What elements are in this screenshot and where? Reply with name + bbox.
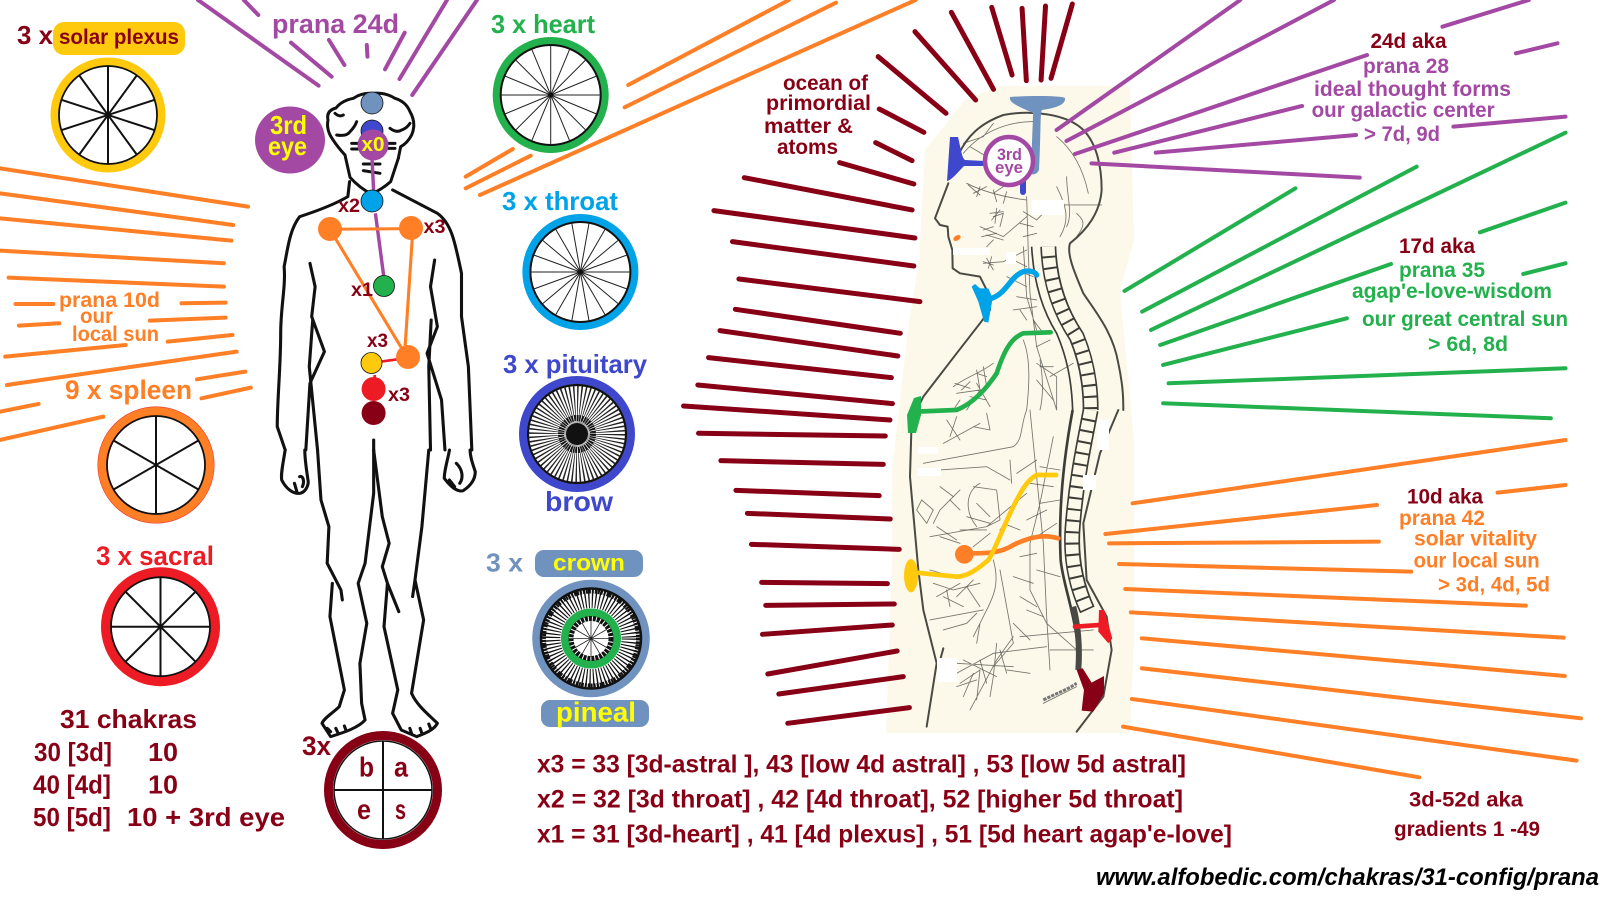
prana 10d label: prana 10d (59, 289, 160, 312)
source url: www.alfobedic.com/chakras/31-config/prana (1096, 864, 1599, 891)
prana 10d label: our (80, 305, 113, 328)
solar plexus chakra (17, 20, 185, 168)
third eye badge: 3rd (270, 110, 307, 140)
gradients text block: 3d-52d aka (1409, 789, 1523, 812)
10d prana 42 text block: solar vitality (1414, 528, 1537, 551)
third eye badge on profile (985, 137, 1033, 185)
10d prana 42 text block: 10d aka (1407, 485, 1483, 508)
wheel: sacral (106, 572, 215, 681)
wheel: spleen (98, 406, 214, 524)
bottom legend x1 x2 x3: x1 = 31 [3d-heart] , 41 [4d plexus] , 51 [5d heart agap'e-love] (537, 821, 1232, 849)
wheel: base (328, 736, 438, 844)
chakra count table: 10 + 3rd eye (127, 802, 285, 832)
base letters: e (357, 794, 371, 825)
body labels x1 x2 x3: x3 (388, 385, 410, 406)
base letters: a (394, 752, 408, 783)
pill: solar plexus (53, 22, 185, 55)
heart chakra (491, 9, 605, 149)
third eye badge (255, 106, 325, 174)
24d prana 28 text block: > 7d, 9d (1364, 123, 1440, 146)
17d prana 35 text block: agap'e-love-wisdom (1352, 280, 1552, 303)
chakra connection lines on body (330, 157, 413, 380)
24d prana 28 text block: our galactic center (1312, 99, 1495, 122)
heart connection (green) (907, 332, 1051, 433)
brain connection: pituitary brow (indigo) (947, 137, 1026, 195)
ocean of primordial matter label: ocean of (783, 72, 869, 95)
rays: orange prana from upper centre (466, 0, 916, 195)
side anatomical figure with nerves (886, 86, 1134, 733)
17d prana 35 text block: our great central sun (1362, 308, 1568, 331)
crown and pineal chakra (486, 547, 649, 727)
24d prana 28 text block: prana 28 (1363, 55, 1449, 78)
solar plexus, spleen, sacral and base connections (904, 475, 1112, 712)
rays: dark red lower (721, 461, 909, 723)
bottom legend x1 x2 x3: x3 = 33 [3d-astral ], 43 [low 4d astral] , 53 [low 5d astral] (537, 751, 1186, 779)
spleen chakra (65, 375, 214, 524)
17d prana 35 text block: > 6d, 8d (1428, 333, 1508, 356)
pill: crown (535, 549, 643, 577)
head with curly hair (328, 93, 414, 194)
label: 3 x throat: 3 x throat (502, 186, 618, 216)
heading: prana 24d: prana 24d (272, 9, 399, 39)
rays: orange prana from left (0, 168, 251, 440)
chakra count table: 40 [4d] (33, 769, 111, 799)
10d prana 42 text block: > 3d, 4d, 5d (1438, 574, 1550, 597)
rays: purple prana on right (1057, 0, 1566, 178)
24d prana 28 text block: 24d aka (1370, 30, 1447, 53)
third eye badge: eye (268, 131, 307, 161)
throat chakra (502, 186, 634, 326)
label: 3 x pituitary: 3 x pituitary (503, 349, 648, 379)
body labels x1 x2 x3: x1 (351, 280, 373, 301)
rays: purple prana from top onto left figure (198, 0, 477, 95)
wheel: throat (526, 218, 634, 326)
label: 3 x heart: 3 x heart (491, 9, 595, 39)
pituitary chakra (503, 349, 648, 517)
wheel: solar plexus (55, 62, 161, 168)
base letters: s (395, 794, 406, 825)
body labels x1 x2 x3 (338, 196, 446, 406)
chakra count table: 10 (148, 737, 178, 767)
label: 9 x spleen: 9 x spleen (65, 375, 192, 405)
ocean of primordial matter label: primordial (766, 92, 871, 115)
x0 third-eye marker (358, 130, 388, 160)
10d prana 42 text block: our local sun (1414, 549, 1540, 572)
label: 3x: 3x (302, 731, 331, 761)
chakra count table (33, 704, 285, 832)
white smudges on figure (917, 200, 1109, 682)
17d prana 35 text block: 17d aka (1399, 235, 1475, 258)
pill: crown: crown (553, 549, 625, 575)
label: eye: eye (995, 158, 1023, 177)
x0 third-eye marker: x0 (362, 134, 384, 156)
chakra dots on body (318, 92, 423, 425)
rays: orange on right (1105, 440, 1581, 777)
bottom legend x1 x2 x3 (537, 751, 1232, 849)
label: 3 x: 3 x (17, 20, 54, 50)
24d prana 28 text block (1312, 30, 1511, 146)
24d prana 28 text block: ideal thought forms (1314, 78, 1511, 101)
base letters: b (359, 752, 374, 783)
small orange mark on lip (952, 234, 962, 242)
base chakra (302, 731, 438, 844)
body labels x1 x2 x3: x3 (367, 331, 388, 352)
brain connection: crown chakra (steel blue) (1010, 96, 1065, 174)
pill: solar plexus: solar plexus (59, 26, 179, 49)
body labels x1 x2 x3: x2 (338, 196, 360, 217)
chakra count table: 31 chakras (60, 704, 197, 734)
chakra count table: 30 [3d] (34, 737, 112, 767)
chakra count table: 50 [5d] (33, 802, 111, 832)
10d prana 42 text block: prana 42 (1399, 507, 1485, 530)
label: brow: brow (545, 486, 613, 517)
sacral chakra (96, 541, 215, 681)
ocean of primordial matter label: atoms (777, 136, 838, 159)
10d prana 42 text block (1399, 485, 1550, 597)
body labels x1 x2 x3: x3 (424, 217, 446, 238)
ocean of primordial matter label: matter & (764, 115, 853, 138)
label: 3 x: 3 x (486, 547, 524, 577)
wheel: heart (497, 41, 605, 149)
chakra count table: 10 (148, 769, 178, 799)
17d prana 35 text block: prana 35 (1399, 259, 1485, 282)
gradients text block: gradients 1 -49 (1394, 818, 1540, 841)
label: 3rd: 3rd (997, 145, 1022, 164)
prana 10d label (59, 289, 160, 346)
rays: dark red ocean of primordial matter (top) (684, 7, 1026, 436)
base letters (357, 752, 408, 825)
wheel: crown with pineal centre (536, 584, 646, 693)
label: 3 x sacral: 3 x sacral (96, 541, 214, 571)
wheel: pituitary (523, 380, 631, 488)
throat connection (blue) (972, 271, 1037, 323)
rays: green on right (1125, 133, 1566, 418)
rays: dark red top right of head (1041, 4, 1072, 80)
17d prana 35 text block (1352, 235, 1568, 356)
gradients text block (1394, 789, 1540, 841)
front body figure (277, 93, 475, 737)
prana 10d label: local sun (72, 323, 159, 346)
ocean of primordial matter label (764, 72, 871, 159)
pill: pineal: pineal (556, 696, 636, 727)
bottom legend x1 x2 x3: x2 = 32 [3d throat] , 42 [4d throat], 52 [higher 5d throat] (537, 786, 1183, 814)
